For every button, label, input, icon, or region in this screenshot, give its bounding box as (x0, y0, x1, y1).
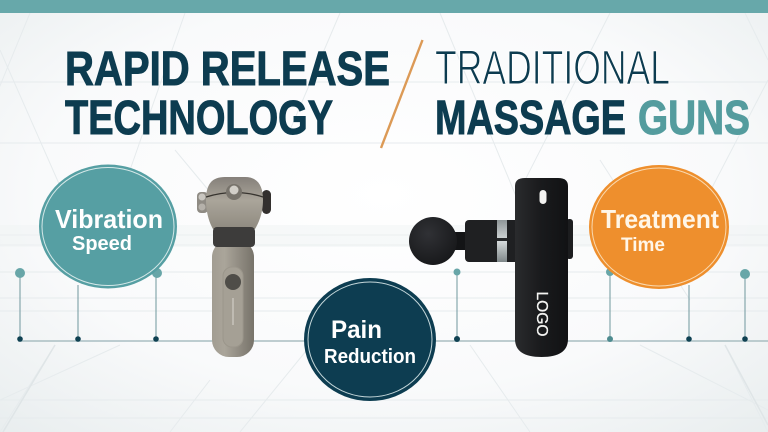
callout: treatment time: Time (621, 235, 665, 256)
callout: vibration speed (39, 164, 177, 288)
callout: treatment time: Treatment (601, 204, 719, 234)
icon: rapid release massage device (197, 177, 271, 357)
divider slash (381, 40, 422, 148)
title: traditional massage guns: MASSAGE (435, 92, 626, 145)
callout: vibration speed: Speed (72, 233, 132, 255)
callout: treatment time (589, 165, 729, 289)
title: traditional massage guns: TRADITIONAL (435, 42, 670, 95)
title: traditional massage guns (435, 42, 750, 145)
top bar (0, 0, 768, 13)
title: rapid release technology: TECHNOLOGY (65, 92, 333, 145)
callout: pain reduction: Reduction (324, 346, 416, 368)
callout: vibration speed: Vibration (55, 204, 163, 234)
icon: traditional massage gun: LOGO (533, 292, 550, 336)
title: rapid release technology (65, 43, 390, 145)
callout: pain reduction: Pain (331, 316, 382, 344)
timeline: left and right axis with markers (15, 268, 768, 342)
callout: pain reduction (304, 278, 436, 401)
title: rapid release technology: RAPID RELEASE (65, 43, 390, 96)
icon: traditional massage gun (409, 178, 573, 357)
